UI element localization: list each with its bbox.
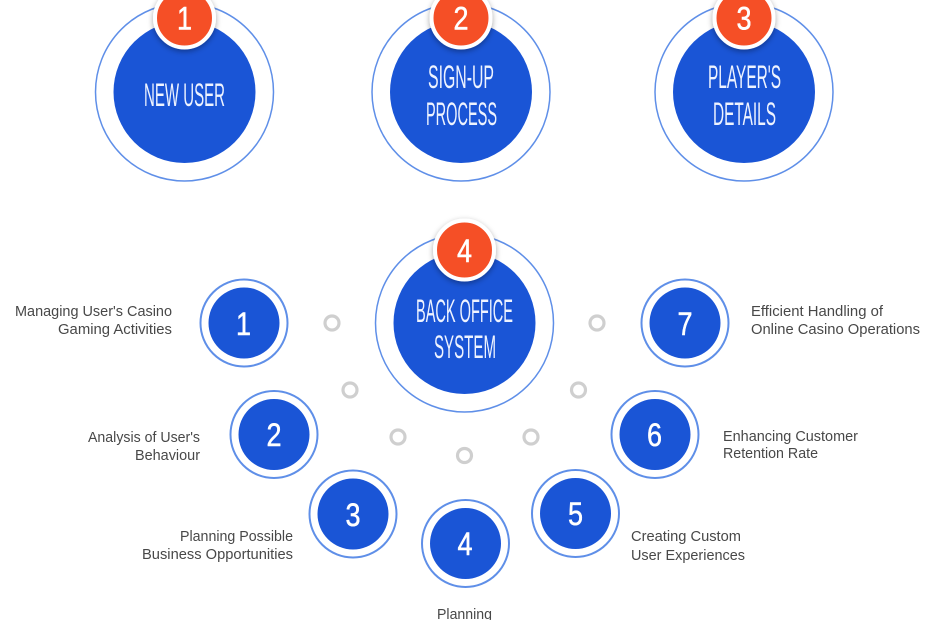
item 7: Efficient Handling of <box>751 304 884 320</box>
item 6: Enhancing Customer <box>723 429 858 445</box>
item 5: Creating Custom <box>631 529 741 545</box>
step 2: sign-up process: PROCESS <box>426 96 497 132</box>
item 3 <box>142 470 396 563</box>
item 3: 3 <box>346 497 360 533</box>
item 4: 4 <box>458 526 472 562</box>
heading: sign-up process: SIGN-UP <box>428 59 494 95</box>
badge 3: 3 <box>736 0 752 36</box>
badge 4 <box>435 220 494 280</box>
item 2: 2 <box>266 417 282 453</box>
item 1 <box>15 280 288 366</box>
item 3: Planning Possible <box>180 529 293 545</box>
item 4 <box>422 500 509 620</box>
step 3: player's details <box>655 0 833 181</box>
heading: player's details <box>708 59 781 132</box>
connector dots <box>325 316 604 462</box>
heading: sign-up process <box>426 59 497 132</box>
item 6 <box>612 391 858 478</box>
item 7: 7 <box>678 306 692 342</box>
badge 4: 4 <box>457 233 472 269</box>
item 5: User Experiences <box>631 548 745 564</box>
heading: back office system: SYSTEM <box>434 329 496 365</box>
step 4: back office system: BACK OFFICE <box>416 293 513 329</box>
badge 3 <box>714 0 774 48</box>
item 7 <box>642 280 920 366</box>
item 6: Retention Rate <box>723 446 818 462</box>
item 2: Analysis of User's <box>88 430 200 446</box>
step 4: back office system <box>376 220 554 412</box>
badge 1 <box>155 0 214 48</box>
item 2 <box>88 391 318 478</box>
step 1: new user: NEW USER <box>144 77 225 113</box>
badge 2 <box>432 0 490 48</box>
item 1: Managing User's Casino <box>15 304 172 320</box>
badge 1: 1 <box>177 0 192 36</box>
item 6: 6 <box>647 417 662 453</box>
item 1: 1 <box>236 306 251 342</box>
step 3: player's details: PLAYER'S <box>708 59 781 95</box>
heading: back office system <box>416 293 513 365</box>
item 3: Business Opportunities <box>142 547 293 563</box>
item 5 <box>532 470 745 564</box>
item 1: Gaming Activities <box>58 322 172 338</box>
item 5: 5 <box>568 496 583 532</box>
step 1: new user <box>96 0 274 181</box>
badge 2: 2 <box>454 0 468 36</box>
item 7: Online Casino Operations <box>751 322 920 338</box>
step 2: sign-up process <box>372 0 550 181</box>
item 2: Behaviour <box>135 448 200 464</box>
heading: player's details: DETAILS <box>713 96 776 132</box>
